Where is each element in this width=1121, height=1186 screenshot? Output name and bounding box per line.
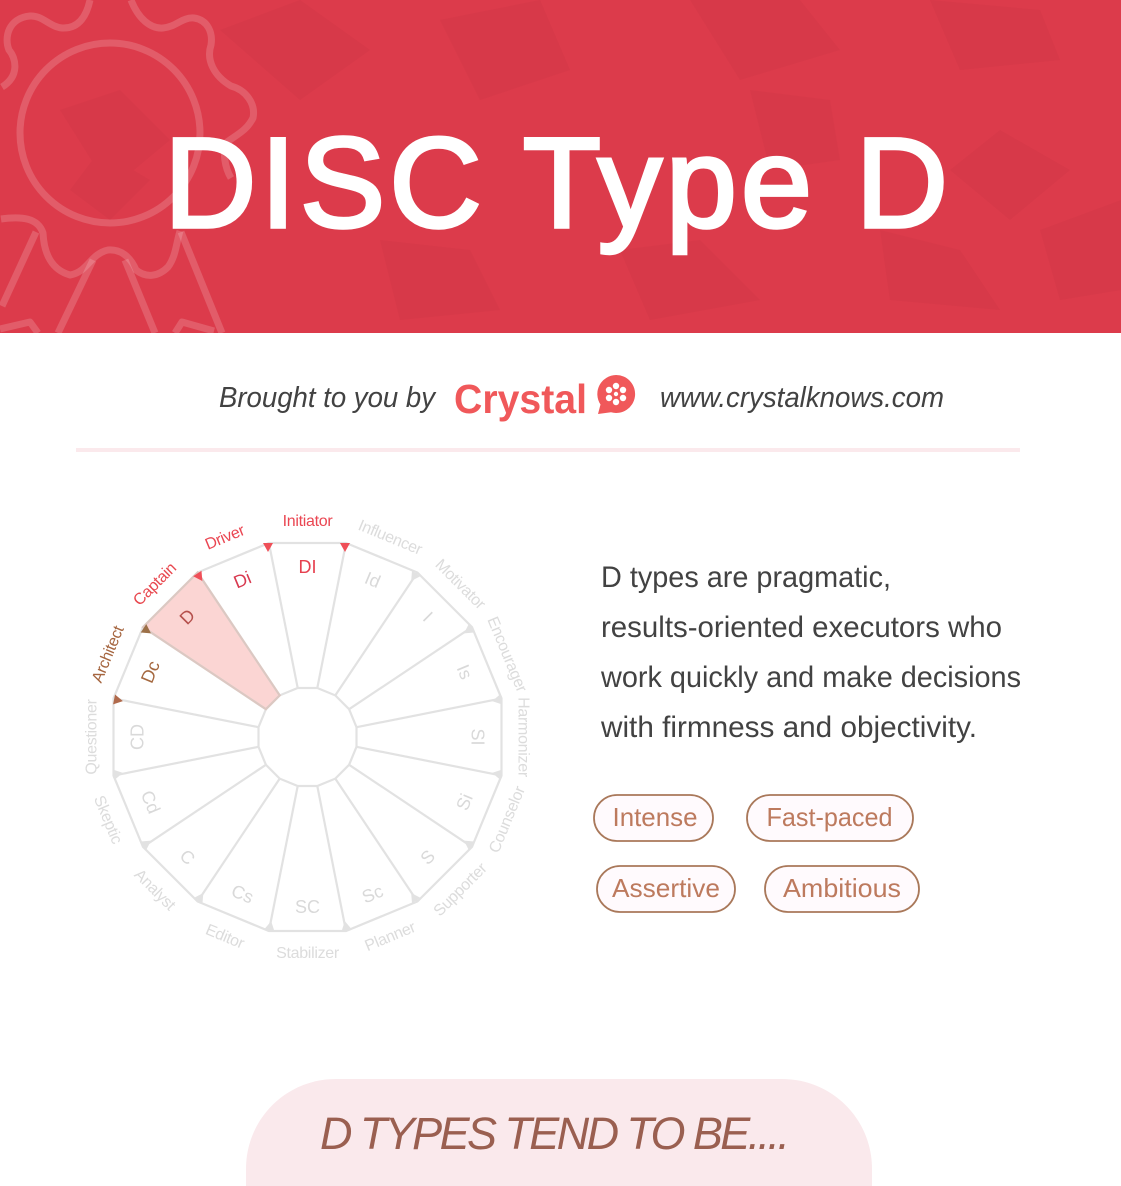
- outer role labels: Captain: [130, 560, 180, 609]
- inner type labels: Di: [231, 567, 254, 592]
- icon: speech bubble flower: [597, 375, 635, 414]
- vertex markers: [113, 543, 502, 931]
- header banner: [0, 0, 1121, 333]
- website url: www.crystalknows.com: [660, 382, 944, 414]
- inner type labels: I: [419, 608, 437, 626]
- outer role labels: Planner: [363, 919, 419, 955]
- inner type labels: Sc: [359, 881, 386, 907]
- outer role labels: Architect: [89, 623, 128, 685]
- description text: D types are pragmatic,: [601, 561, 891, 594]
- section heading text: D TYPES TEND TO BE....: [320, 1108, 790, 1159]
- outer role labels: Influencer: [356, 517, 425, 559]
- logo: Crystal: Crystal: [454, 376, 587, 422]
- outer role labels: Questioner: [84, 698, 100, 775]
- outer role labels: Harmonizer: [514, 697, 532, 778]
- wheel outline: [114, 543, 502, 931]
- inner type labels: Si: [452, 791, 477, 813]
- description text: with firmness and objectivity.: [600, 711, 977, 744]
- inner type labels: S: [416, 846, 439, 869]
- section heading pill: [246, 1079, 872, 1186]
- outer role labels: Initiator: [283, 513, 333, 530]
- inner type labels: CD: [128, 724, 148, 750]
- tag: Ambitious: [765, 866, 919, 912]
- inner type labels: Cd: [137, 788, 164, 817]
- outer role labels: Counselor: [486, 783, 529, 856]
- inner type labels: SI: [468, 728, 488, 746]
- inner type labels: Cs: [228, 881, 256, 908]
- outer role labels: Supporter: [431, 860, 491, 920]
- outer role labels: Skeptic: [90, 793, 125, 847]
- outer role labels: Encourager: [483, 614, 530, 696]
- highlighted slice: D: [142, 572, 280, 709]
- description text: results-oriented executors who: [601, 611, 1002, 644]
- tag: Fast-paced: Fast-paced: [766, 802, 892, 832]
- tag: Assertive: Assertive: [612, 873, 720, 903]
- inner type labels: SC: [295, 897, 320, 917]
- byline: brought to you by: Brought to you by: [219, 382, 436, 414]
- tag: Intense: Intense: [612, 802, 698, 832]
- inner type labels: Dc: [137, 658, 164, 686]
- outer role labels: Editor: [203, 922, 247, 953]
- tag: Assertive: [597, 866, 735, 912]
- description text: [600, 561, 1021, 744]
- divider: [76, 448, 1020, 452]
- outer role labels: Motivator: [432, 556, 489, 614]
- outer role labels: Stabilizer: [276, 945, 340, 962]
- tag: Intense: [594, 795, 713, 841]
- slice border: D: [143, 572, 280, 709]
- inner type labels: Is: [453, 662, 476, 682]
- inner type labels: D: [176, 605, 199, 628]
- tag: Ambitious: Ambitious: [783, 873, 901, 903]
- tag: Fast-paced: [747, 795, 913, 841]
- title: DISC Type D: [164, 112, 948, 255]
- icon: award ribbon watermark: [0, 0, 254, 333]
- inner type labels: [128, 557, 488, 917]
- inner type labels: C: [176, 846, 199, 869]
- outer role labels: Driver: [203, 522, 248, 554]
- DISC wheel chart: [84, 513, 532, 962]
- outer role labels: [84, 513, 532, 962]
- inner type labels: Id: [362, 568, 383, 592]
- outer role labels: Analyst: [131, 866, 179, 915]
- description text: work quickly and make decisions: [600, 661, 1021, 694]
- inner type labels: DI: [298, 557, 316, 577]
